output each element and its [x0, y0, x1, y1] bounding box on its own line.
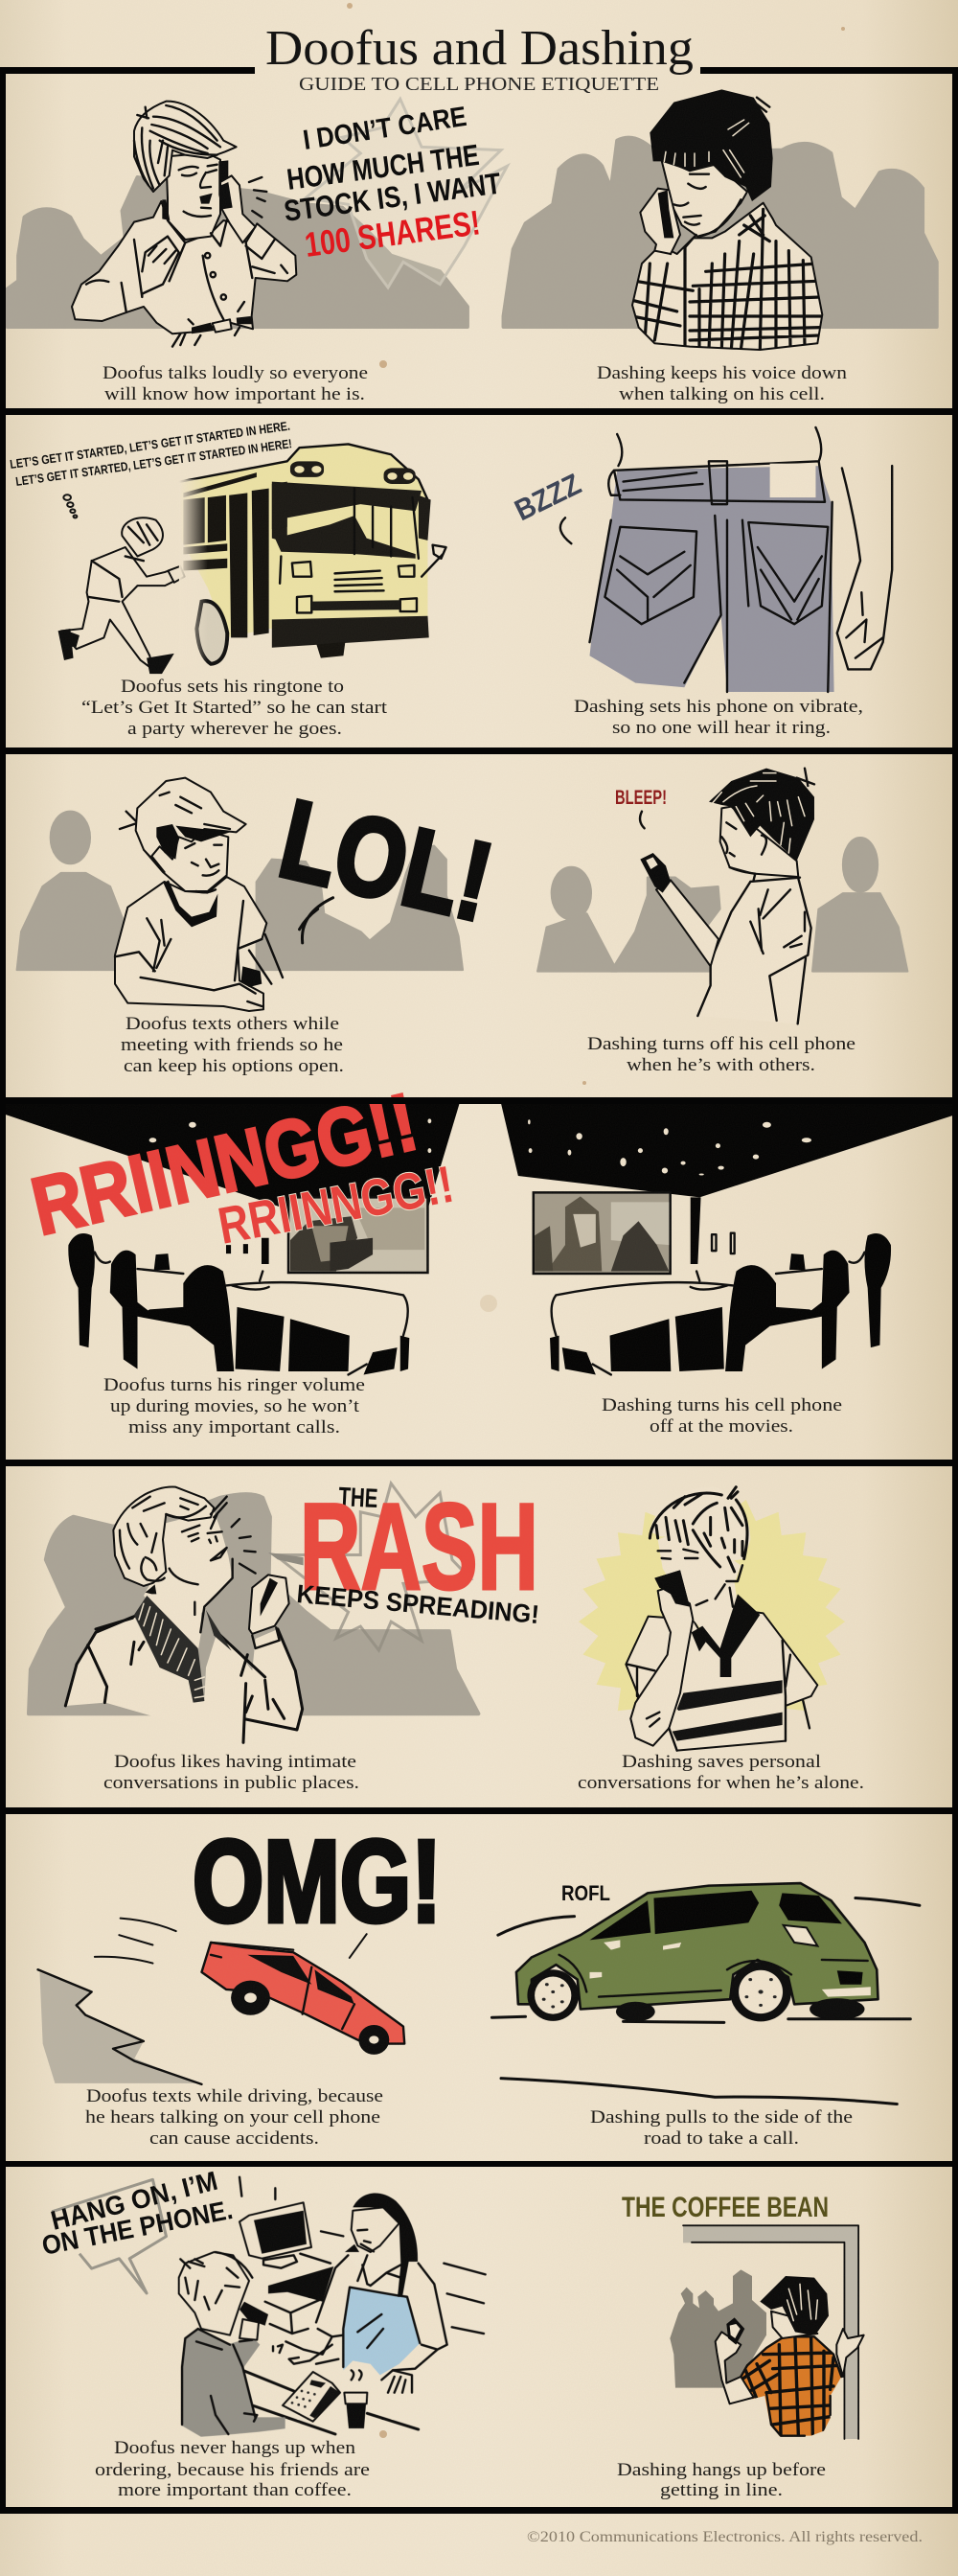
Dashing whispering — [626, 1487, 817, 1751]
captions — [95, 2438, 826, 2500]
captions — [103, 1375, 842, 1438]
Doofus texting — [115, 778, 283, 1011]
captions: can keep his options open. — [124, 1056, 344, 1076]
captions: when talking on his cell. — [619, 384, 825, 404]
RRIINNGG text: RRIINNGG!! — [214, 1156, 458, 1255]
coffee shop sign: THE COFFEE BEAN — [622, 2192, 829, 2223]
HANG ON text: ON THE PHONE. — [39, 2195, 235, 2261]
ROFL text: ROFL — [561, 1881, 610, 1905]
captions: up during movies, so he won’t — [110, 1396, 360, 1416]
running Doofus — [58, 518, 185, 674]
captions — [121, 1014, 855, 1076]
crowd silhouette left — [8, 177, 468, 327]
captions: road to take a call. — [644, 2128, 799, 2149]
captions — [103, 1752, 864, 1793]
cliff — [38, 1919, 367, 2084]
captions: will know how important he is. — [104, 384, 365, 404]
green car — [491, 1883, 920, 2104]
captions — [103, 363, 848, 404]
captions: getting in line. — [660, 2480, 783, 2500]
RRIINNGG text: RRIINNGG!! — [24, 1076, 425, 1254]
captions — [85, 2086, 853, 2149]
title: GUIDE TO CELL PHONE ETIQUETTE — [299, 74, 659, 95]
lyric text: LET’S GET IT STARTED, LET’S GET IT STARTED IN HERE! — [14, 436, 293, 489]
captions: Dashing turns off his cell phone — [587, 1034, 855, 1054]
thought bubbles — [63, 494, 77, 518]
panel 4: movies — [4, 1076, 953, 1438]
captions: so no one will hear it ring. — [612, 718, 831, 738]
LOL text: LOL! — [269, 776, 503, 945]
Doofus on phone — [72, 102, 296, 347]
captions: Doofus never hangs up when — [114, 2438, 356, 2458]
Doofus looking up — [65, 1487, 304, 1742]
captions: Dashing keeps his voice down — [597, 363, 848, 383]
panel 6: driving — [38, 1816, 920, 2149]
doorway — [683, 2225, 858, 2439]
Dashing with phone — [640, 769, 814, 1024]
captions: Dashing hangs up before — [617, 2460, 826, 2480]
speech bubble — [52, 2179, 166, 2293]
seats right — [550, 1197, 891, 1374]
captions — [81, 677, 863, 739]
paper specks — [238, 3, 847, 2438]
ceiling left — [4, 1103, 460, 1209]
red car — [201, 1943, 404, 2055]
panel 7: coffee shop — [39, 2166, 864, 2500]
captions: a party wherever he goes. — [127, 719, 342, 739]
captions: he hears talking on your cell phone — [85, 2107, 380, 2128]
captions: Doofus texts others while — [125, 1014, 339, 1034]
movie screen left — [288, 1197, 427, 1273]
crowd silhouette right — [504, 138, 937, 327]
seats left — [68, 1233, 409, 1374]
jeans — [560, 427, 892, 692]
captions: Dashing sets his phone on vibrate, — [574, 697, 863, 717]
captions: Dashing pulls to the side of the — [590, 2107, 853, 2128]
burst outline — [275, 1484, 470, 1650]
HANG ON text: HANG ON, I’M — [48, 2166, 220, 2236]
OMG text: OMG! — [193, 1816, 442, 1946]
captions: miss any important calls. — [128, 1417, 340, 1438]
counter, monitor, barista and Doofus — [179, 2177, 486, 2436]
captions: when he’s with others. — [627, 1055, 815, 1075]
speech text: I DON’T CARE — [301, 102, 468, 156]
panel 2: ringtone — [9, 419, 892, 739]
footer copyright: ©2010 Communications Electronics. All rights reserved. — [527, 2529, 923, 2545]
burst — [306, 99, 507, 288]
Dashing on phone — [626, 89, 822, 350]
captions: more important than coffee. — [118, 2480, 352, 2500]
captions: conversations for when he’s alone. — [578, 1773, 864, 1793]
captions: Doofus sets his ringtone to — [121, 677, 344, 697]
speech text — [282, 102, 503, 264]
sunburst — [579, 1495, 845, 1748]
captions: meeting with friends so he — [121, 1035, 343, 1055]
speech text: HOW MUCH THE — [285, 138, 481, 196]
speech text: STOCK IS, I WANT — [282, 166, 503, 228]
ceiling lights — [149, 1118, 811, 1176]
panel 3: texting with friends — [17, 769, 907, 1076]
captions: Doofus texts while driving, because — [86, 2086, 383, 2106]
captions: Doofus turns his ringer volume — [103, 1375, 365, 1395]
captions: can cause accidents. — [149, 2128, 319, 2149]
title: Doofus and Dashing — [265, 21, 694, 76]
RASH text: RASH — [300, 1479, 538, 1616]
ceiling right — [501, 1103, 953, 1197]
captions: Doofus likes having intimate — [114, 1752, 356, 1772]
speech text: 100 SHARES! — [303, 202, 482, 264]
captions: ordering, because his friends are — [95, 2460, 370, 2480]
people in line — [670, 2269, 766, 2388]
captions: Dashing saves personal — [622, 1752, 821, 1772]
RASH text: KEEPS SPREADING! — [295, 1579, 540, 1629]
Dashing in line — [670, 2269, 864, 2436]
captions: conversations in public places. — [103, 1773, 359, 1793]
captions: off at the movies. — [650, 1416, 793, 1437]
RASH text — [295, 1479, 540, 1629]
school bus — [179, 444, 446, 667]
RASH text: THE — [338, 1482, 378, 1513]
silhouette behind Doofus — [29, 1494, 478, 1714]
captions: “Let’s Get It Started” so he can start — [81, 698, 388, 718]
panel 1: talking loudly — [8, 89, 937, 404]
captions: Dashing turns his cell phone — [602, 1395, 842, 1415]
BZZZ text: BZZZ — [510, 467, 586, 527]
BLEEP text: BLEEP! — [615, 787, 667, 809]
panel 5: intimate conversations — [29, 1479, 864, 1793]
lyric text: LET’S GET IT STARTED, LET’S GET IT STARTED IN HERE. — [9, 419, 291, 472]
friends silhouettes — [17, 812, 907, 972]
movie screen right — [534, 1192, 671, 1274]
LOL tail — [300, 898, 333, 943]
captions: Doofus talks loudly so everyone — [103, 363, 368, 383]
HANG ON text — [39, 2166, 235, 2261]
